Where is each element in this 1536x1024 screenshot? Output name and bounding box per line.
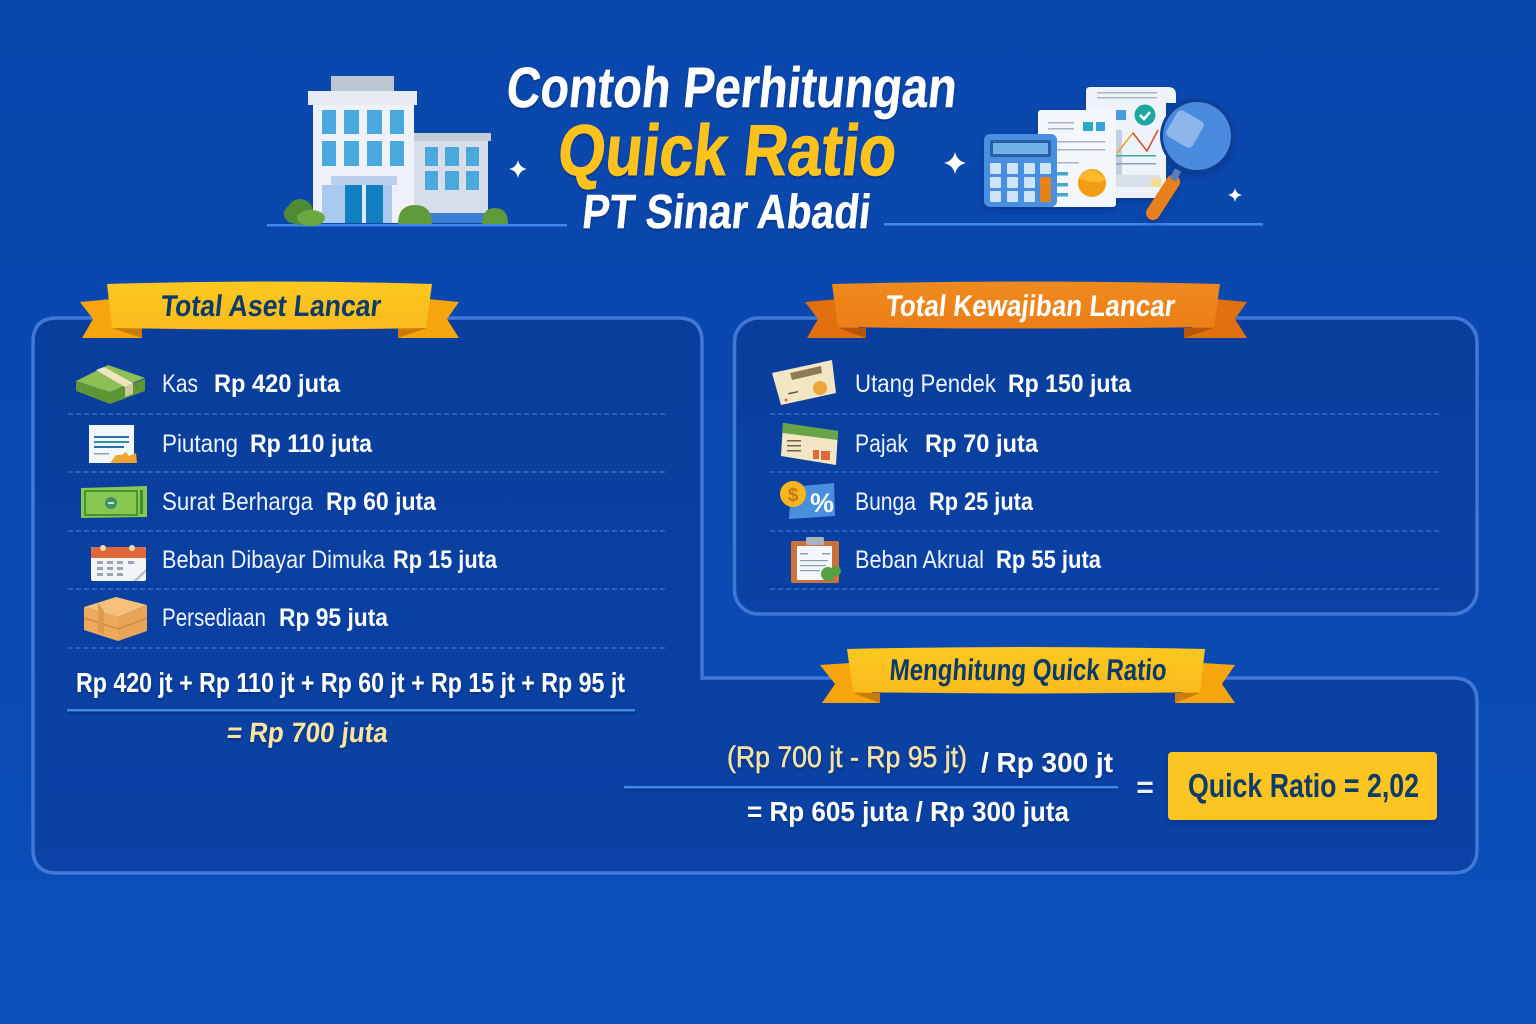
row: Surat Berharga	[81, 486, 437, 518]
panel: left assets and quick ratio calculation outline	[33, 318, 1477, 873]
row: Bunga	[780, 481, 1034, 519]
row: Beban Dibayar Dimuka: Beban Dibayar Dimuka	[162, 546, 385, 574]
list: current assets	[68, 365, 665, 648]
row: Utang Pendek: Utang Pendek	[855, 370, 996, 398]
icon: tax form	[781, 423, 838, 465]
ribbon: Menghitung Quick Ratio	[820, 647, 1235, 703]
icon: invoice	[89, 425, 137, 463]
numerator: cash-equivalent assets: (Rp 700 jt - Rp 95 jt)	[727, 741, 967, 774]
title block	[504, 56, 960, 239]
result box: Quick Ratio = 2,02: Quick Ratio = 2,02	[1188, 767, 1419, 804]
panel: current liabilities	[734, 318, 1477, 614]
title line: Contoh Perhitungan: Contoh Perhitungan	[504, 56, 960, 120]
title line: PT Sinar Abadi: PT Sinar Abadi	[580, 185, 874, 239]
ribbon: Total Aset Lancar	[80, 282, 459, 338]
header underline left	[267, 224, 567, 226]
icon: debt note	[772, 360, 836, 405]
title line: Quick Ratio: Quick Ratio	[554, 111, 901, 191]
row: Beban Dibayar Dimuka: Rp 15 juta	[393, 546, 498, 574]
row: Piutang: Piutang	[162, 430, 238, 458]
result: Rp 700 juta: = Rp 700 juta	[225, 717, 390, 748]
ribbon label: Menghitung Quick Ratio	[889, 654, 1168, 687]
row: Persediaan	[84, 597, 389, 641]
row: Utang Pendek	[772, 360, 1132, 405]
row: Beban Akrual	[791, 537, 1102, 583]
ribbon label: Total Aset Lancar	[159, 290, 383, 323]
ribbon label: Total Kewajiban Lancar	[884, 290, 1177, 323]
icon: sparkle small	[1228, 188, 1242, 202]
numerator: divisor: / Rp 300 jt	[981, 747, 1113, 778]
row: Beban Dibayar Dimuka	[91, 545, 498, 581]
formula: total current assets: Rp 420 jt + Rp 110 jt + Rp 60 jt + Rp 15 jt + Rp 95 jt	[76, 667, 625, 698]
row: Kas: Kas	[162, 370, 198, 398]
icon: cash stack	[76, 365, 145, 404]
denominator line: result: = Rp 605 juta / Rp 300 juta	[747, 796, 1069, 827]
icon: clipboard	[791, 537, 841, 583]
row: Beban Akrual: Beban Akrual	[855, 546, 984, 574]
ribbon: Total Kewajiban Lancar	[805, 282, 1247, 338]
icon: office building	[284, 76, 508, 226]
row: Bunga: Rp 25 juta	[929, 488, 1034, 516]
row: Piutang: Rp 110 juta	[250, 430, 373, 458]
equals sign: =	[1136, 771, 1154, 804]
icon: banknote	[81, 486, 147, 518]
row: Piutang	[89, 425, 373, 463]
row: Surat Berharga: Rp 60 juta	[326, 488, 437, 516]
row: Pajak	[781, 423, 1039, 465]
row: Bunga: Bunga	[855, 488, 916, 516]
row: Pajak: Rp 70 juta	[925, 430, 1039, 458]
icon: coin and percent	[780, 481, 835, 519]
header underline right	[884, 223, 1263, 226]
icon: cardboard box	[84, 597, 147, 641]
row: Persediaan: Rp 95 juta	[279, 604, 389, 632]
icon: coin and percent: $	[788, 485, 799, 506]
result box: Quick Ratio = 2,02	[1168, 752, 1437, 820]
row: Kas	[76, 365, 341, 404]
icon: calendar	[91, 545, 146, 581]
row: Beban Akrual: Rp 55 juta	[996, 546, 1102, 574]
list: current liabilities	[770, 360, 1440, 589]
icon: sparkle right	[944, 152, 966, 174]
formula: total current assets	[67, 667, 635, 748]
row: Utang Pendek: Rp 150 juta	[1008, 370, 1132, 398]
icon: sparkle left	[509, 160, 527, 178]
formula: quick ratio fraction	[624, 741, 1154, 827]
row: Surat Berharga: Surat Berharga	[162, 488, 313, 516]
row: Persediaan: Persediaan	[162, 604, 266, 632]
row: Pajak: Pajak	[855, 430, 908, 458]
icon: calculator, reports and magnifier	[984, 87, 1234, 213]
icon: coin and percent: %	[810, 488, 834, 518]
row: Kas: Rp 420 juta	[214, 370, 341, 398]
